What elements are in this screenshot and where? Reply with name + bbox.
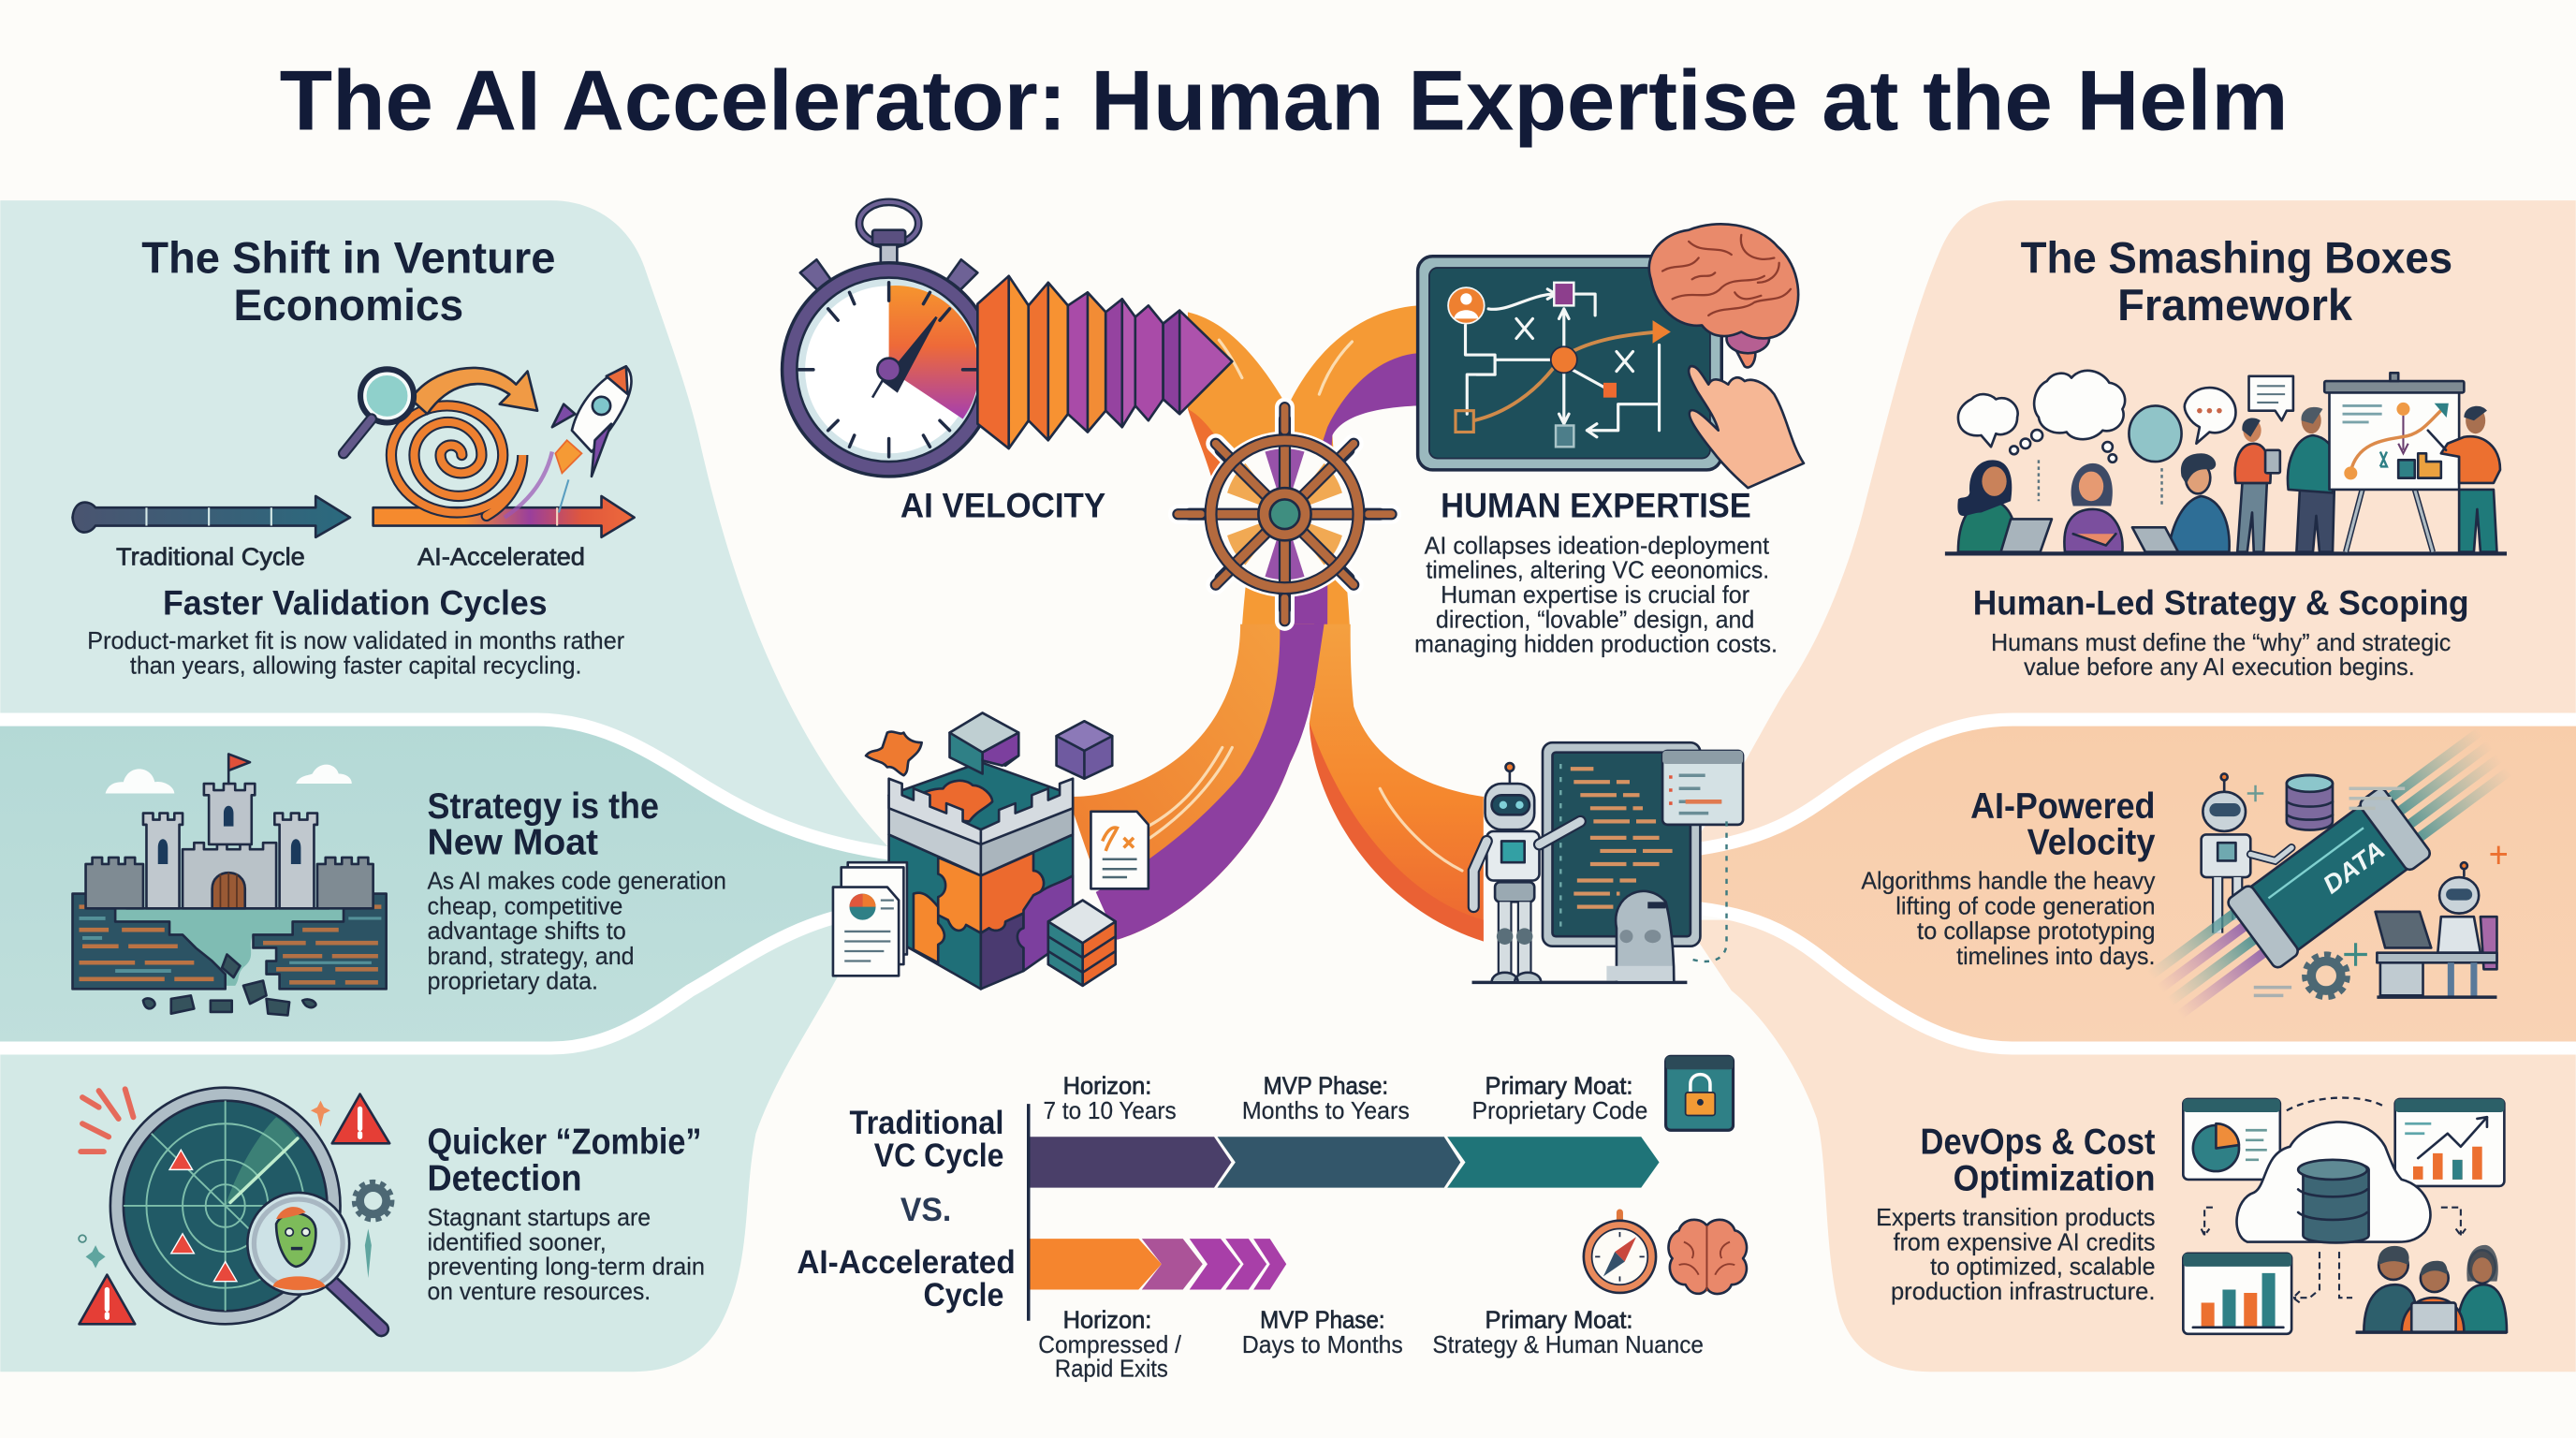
label: accelerated horizon [1038, 1308, 1182, 1382]
icon: AI-accelerated arrow with spiral and rocket [344, 366, 635, 537]
text: Human-Led Strategy body [1991, 630, 2452, 681]
heading: The Shift in Venture Economics: The Shift in Venture [141, 233, 555, 283]
label: AI-Accelerated Cycle: Cycle [923, 1277, 1003, 1313]
text: Quicker Zombie Detection body: preventing long-term drain [428, 1255, 705, 1281]
text: Strategy is the New Moat body: brand, strategy, and [428, 944, 635, 970]
label: accelerated MVP phase: Days to Months [1242, 1332, 1403, 1358]
heading: The Smashing Boxes Framework [2021, 233, 2452, 330]
icon: compressed accordion velocity arrow [977, 276, 1232, 448]
text: Faster Validation Cycles body: Product-market fit is now validated in months rather [87, 628, 625, 654]
heading: Strategy is the New Moat [428, 786, 659, 862]
label: accelerated primary moat: Primary Moat: [1486, 1308, 1632, 1334]
label: traditional horizon: Horizon: [1063, 1074, 1151, 1100]
label: accelerated horizon: Compressed / [1038, 1332, 1182, 1358]
label: accelerated horizon: Rapid Exits [1055, 1356, 1168, 1382]
text: Quicker Zombie Detection body: on venture resources. [428, 1279, 651, 1305]
label: traditional MVP phase [1242, 1074, 1410, 1124]
label: accelerated primary moat: Strategy & Human Nuance [1432, 1332, 1704, 1358]
heading: Quicker Zombie Detection: Detection [428, 1158, 581, 1198]
label: traditional MVP phase: MVP Phase: [1264, 1074, 1388, 1100]
icon: compass [1584, 1212, 1656, 1293]
text: Strategy is the New Moat body [428, 868, 726, 994]
heading: DevOps and Cost Optimization: Optimization [1954, 1158, 2155, 1198]
icon: code lock window [1666, 1056, 1734, 1130]
text: Quicker Zombie Detection body: identified sooner, [428, 1229, 607, 1255]
icon: strategy tablet [1418, 257, 1721, 470]
heading: Strategy is the New Moat: Strategy is the [428, 786, 659, 827]
label: Traditional VC Cycle [849, 1105, 1003, 1174]
heading: DevOps and Cost Optimization [1921, 1123, 2156, 1198]
panel: AI-Powered Velocity background [1684, 720, 2576, 1049]
heading: AI-Powered Velocity: AI-Powered [1970, 786, 2155, 827]
heading: Quicker Zombie Detection: Quicker “Zombie” [428, 1123, 702, 1163]
heading: The Smashing Boxes Framework: Framework [2117, 281, 2353, 330]
panel: The Shift in Venture Economics background [0, 200, 896, 895]
text: central explanation: managing hidden production costs. [1414, 632, 1778, 658]
title: The AI Accelerator: Human Expertise at the Helm [280, 53, 2289, 149]
label: traditional primary moat: Proprietary Code [1472, 1098, 1647, 1124]
flowing ribbons: AI velocity and human expertise streams [1068, 305, 1484, 941]
text: AI-Powered Velocity body: Algorithms handle the heavy [1861, 868, 2156, 894]
heading: The Shift in Venture Economics [141, 233, 555, 330]
text: central explanation: AI collapses ideation-deployment [1425, 533, 1769, 559]
heading: AI-Powered Velocity: Velocity [2027, 822, 2156, 862]
label: traditional horizon [1044, 1074, 1177, 1124]
text: DevOps and Cost Optimization body [1876, 1205, 2155, 1305]
text: Strategy is the New Moat body: advantage shifts to [428, 918, 626, 945]
text: Strategy is the New Moat body: cheap, competitive [428, 894, 622, 920]
text: Faster Validation Cycles body [87, 628, 625, 679]
label: accelerated horizon: Horizon: [1063, 1308, 1151, 1334]
label: Traditional VC Cycle: Traditional [849, 1105, 1003, 1141]
label: traditional MVP phase: Months to Years [1242, 1098, 1410, 1124]
text: Faster Validation Cycles body: than years, allowing faster capital recycling. [130, 653, 581, 679]
icon: small brain [1669, 1220, 1747, 1294]
text: DevOps and Cost Optimization body: from expensive AI credits [1894, 1229, 2155, 1255]
text: Strategy is the New Moat body: proprietary data. [428, 968, 598, 994]
text: DevOps and Cost Optimization body: production infrastructure. [1891, 1279, 2155, 1305]
icon: radar with zombie under magnifier and alerts [79, 1088, 392, 1329]
AI-accelerated timeline bar [1031, 1239, 1286, 1289]
heading: DevOps and Cost Optimization: DevOps & Cost [1921, 1123, 2156, 1163]
heading: The Smashing Boxes Framework: The Smashing Boxes [2021, 233, 2452, 283]
icon: brain [1649, 224, 1798, 367]
icon: team brainstorming at whiteboard [1945, 371, 2507, 553]
text: central explanation: direction, “lovable” design, and [1436, 607, 1754, 633]
heading: Quicker Zombie Detection [428, 1123, 702, 1198]
text: central explanation: Human expertise is crucial for [1441, 582, 1750, 609]
label: accelerated primary moat [1432, 1308, 1704, 1358]
text: AI-Powered Velocity body [1861, 868, 2156, 970]
label: HUMAN EXPERTISE: HUMAN EXPERTISE [1441, 487, 1751, 525]
text: Human-Led Strategy body: value before any AI execution begins. [2024, 654, 2415, 681]
heading: Human-Led Strategy & Scoping: Human-Led Strategy & Scoping [1973, 583, 2469, 622]
text: Human-Led Strategy body: Humans must define the “why” and strategic [1991, 630, 2452, 656]
text: AI-Powered Velocity body: timelines into days. [1956, 944, 2155, 970]
heading: Faster Validation Cycles: Faster Validation Cycles [163, 583, 548, 622]
traditional timeline bar [1031, 1137, 1660, 1188]
icon: puzzle castle cube [833, 713, 1149, 989]
icon: data pipeline with robots: DATA [2318, 835, 2390, 899]
icon: ship's helm wheel [1178, 407, 1392, 621]
icon: traditional cycle arrow [73, 496, 350, 537]
text: AI-Powered Velocity body: to collapse prototyping [1917, 918, 2155, 945]
text: AI-Powered Velocity body: lifting of code generation [1895, 894, 2155, 920]
text: central explanation [1414, 533, 1778, 658]
heading: Strategy is the New Moat: New Moat [428, 822, 598, 862]
panel: Quicker Zombie Detection background [0, 920, 896, 1372]
label: AI VELOCITY: AI VELOCITY [900, 487, 1105, 525]
axis line [1028, 1104, 1030, 1321]
panel: DevOps and Cost Optimization background [1684, 920, 2576, 1372]
label: AI-Accelerated: AI-Accelerated [417, 543, 585, 571]
icon: castle on crumbling code wall [73, 754, 387, 1015]
text: DevOps and Cost Optimization body: to optimized, scalable [1930, 1255, 2155, 1281]
label: accelerated MVP phase: MVP Phase: [1260, 1308, 1385, 1334]
label: traditional primary moat [1472, 1074, 1647, 1124]
icon: cloud database with dashboards and team [2183, 1098, 2507, 1334]
text: Strategy is the New Moat body: As AI makes code generation [428, 868, 726, 894]
label: AI-Accelerated Cycle [797, 1244, 1016, 1313]
label: traditional primary moat: Primary Moat: [1486, 1074, 1632, 1100]
text: DevOps and Cost Optimization body: Experts transition products [1876, 1205, 2155, 1231]
text: Quicker Zombie Detection body: Stagnant startups are [428, 1205, 651, 1231]
label: Traditional VC Cycle: VC Cycle [874, 1137, 1003, 1174]
heading: AI-Powered Velocity [1970, 786, 2156, 862]
icon: robot at code monitor [1472, 742, 1743, 982]
icon: stopwatch [783, 202, 996, 477]
icon: data pipeline with robots [2142, 720, 2522, 1033]
text: central explanation: timelines, altering VC eeonomics. [1426, 558, 1769, 584]
label: traditional horizon: 7 to 10 Years [1044, 1098, 1177, 1124]
heading: The Shift in Venture Economics: Economics [233, 281, 463, 330]
text: Quicker Zombie Detection body [428, 1205, 705, 1305]
label: Traditional Cycle: Traditional Cycle [116, 543, 305, 571]
label: accelerated MVP phase [1242, 1308, 1403, 1358]
icon: pointing hand [1689, 366, 1804, 488]
panel: The Smashing Boxes Framework background [1684, 200, 2576, 895]
label: versus: VS. [900, 1192, 951, 1228]
panel: Strategy is the New Moat background [0, 720, 896, 1049]
label: AI-Accelerated Cycle: AI-Accelerated [797, 1244, 1016, 1281]
chart: cycle comparison timeline [797, 1056, 1747, 1382]
